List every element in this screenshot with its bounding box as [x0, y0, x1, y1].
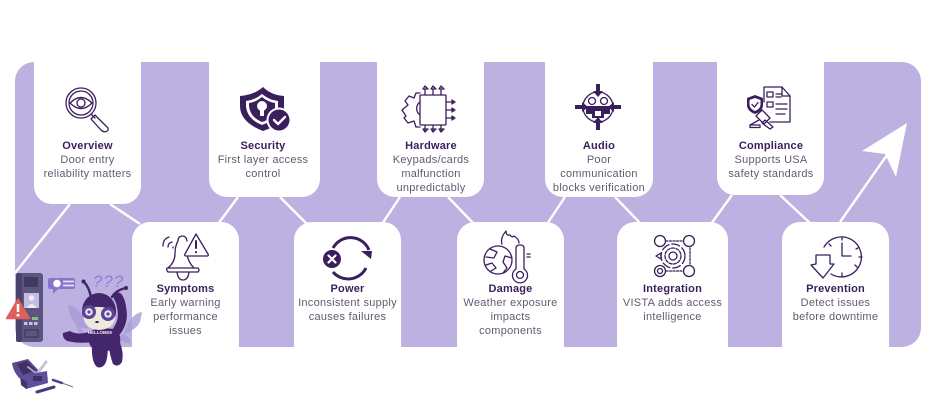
text: Symptoms: Symptoms [157, 283, 214, 295]
text: Audio: Audio [583, 140, 615, 152]
icon: integration network [654, 236, 694, 276]
icon: magnifier with eye [66, 88, 108, 132]
icon: globe, flame and thermometer [484, 231, 530, 283]
text: Symptoms: Early warning [150, 297, 221, 309]
icon: chip and gear [402, 86, 455, 132]
text: Damage: impacts [491, 311, 531, 323]
icon: document, shield and gavel [747, 87, 790, 129]
text: Damage: Damage [488, 283, 532, 295]
text: Power: causes failures [309, 311, 387, 323]
card: Integration [617, 222, 728, 347]
text: Compliance: Compliance [739, 140, 803, 152]
illustration: bee mascot [63, 280, 142, 367]
text: Audio: communication [560, 168, 638, 180]
text: Integration: VISTA adds access [623, 297, 722, 309]
connecting path lines [15, 195, 811, 273]
text: Hardware: malfunction [401, 168, 461, 180]
card: Power [294, 222, 401, 347]
text: Security: First layer access [218, 154, 309, 166]
text: Integration: intelligence [643, 311, 702, 323]
card: Overview [34, 62, 141, 204]
mascot legs [92, 343, 123, 367]
mascot antennae [84, 282, 126, 297]
icon: clock and down arrow [811, 237, 862, 278]
card: Damage [457, 222, 564, 347]
text: Hardware: unpredictably [396, 182, 466, 194]
text: Prevention: Detect issues [801, 297, 871, 309]
mascot wings [68, 305, 142, 343]
icon: bell with warning [163, 234, 208, 280]
text: Hardware: Hardware [405, 140, 457, 152]
mascot torso [88, 328, 120, 351]
mascot left arm [63, 331, 92, 343]
text: Security: Security [240, 140, 286, 152]
card: Symptoms [132, 222, 239, 347]
text: Symptoms: performance [153, 311, 218, 323]
text: Compliance: safety standards [728, 168, 814, 180]
icon: power cycle failure [323, 238, 372, 279]
icon: people with inward arrows [575, 84, 621, 130]
text: Compliance: Supports USA [734, 154, 808, 166]
text: Prevention: before downtime [793, 311, 878, 323]
text: Overview: reliability matters [44, 168, 132, 180]
text: Integration: Integration [643, 283, 702, 295]
icon: shield with check [240, 87, 292, 132]
card: Hardware [377, 62, 484, 197]
illustration: door intercom with warning [6, 273, 43, 342]
illustration: toolbox and tools [12, 359, 73, 392]
text: Power: Power [330, 283, 365, 295]
text: Hardware: Keypads/cards [393, 154, 469, 166]
lavender background panel [15, 62, 921, 347]
growth arrow [840, 123, 907, 222]
text: Overview: Overview [62, 140, 113, 152]
illustration: question marks: ??? [93, 272, 124, 291]
text: Damage: Weather exposure [463, 297, 558, 309]
text: Security: control [246, 168, 280, 180]
card: Prevention [782, 222, 889, 347]
mascot shirt text: HELLOBEE [88, 330, 112, 335]
text: Power: Inconsistent supply [298, 297, 397, 309]
icon: question speech bubble [48, 278, 75, 294]
text: Prevention: Prevention [806, 283, 865, 295]
text: Audio: Poor [587, 154, 611, 166]
card: Security [209, 62, 320, 197]
text: Overview: Door entry [60, 154, 115, 166]
mascot raised right arm [116, 297, 122, 332]
text: Symptoms: issues [169, 325, 202, 337]
icon: red warning triangle [6, 299, 30, 318]
card: Audio [545, 62, 653, 197]
text: Damage: components [479, 325, 542, 337]
mascot head [82, 293, 116, 329]
card: Compliance [717, 62, 824, 195]
text: Audio: blocks verification [553, 182, 645, 194]
